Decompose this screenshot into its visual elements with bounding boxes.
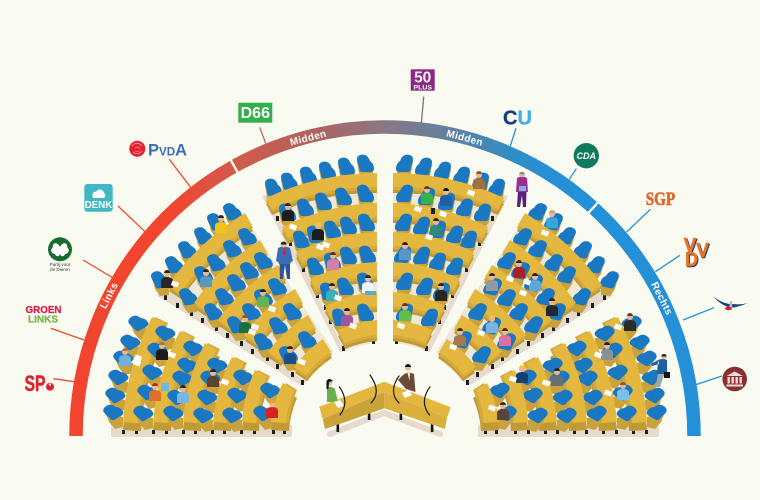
logo: DENK: DENK (85, 200, 113, 211)
logo: SGP: SGP (646, 189, 676, 210)
logo: bird (713, 296, 748, 310)
logo: PvdA (129, 141, 187, 160)
seated members: left middle block (161, 215, 306, 366)
logo: CU: CU (503, 108, 532, 130)
podium papers (334, 390, 412, 408)
seated members: right middle block (449, 210, 558, 351)
logo: Partij voor de Dieren (48, 237, 72, 272)
standing member: blue suit (276, 242, 293, 279)
logo: Partij voor de Dieren: de Dieren (50, 267, 70, 272)
logo: 50PLUS: 50 (414, 70, 431, 86)
speaker podium (319, 364, 451, 434)
panel: right centre bench block (393, 155, 508, 352)
logo: CDA (574, 143, 599, 168)
panel: left centre bench block (262, 155, 377, 352)
standing member: purple suit (516, 172, 528, 207)
logo: CDA: CDA (577, 151, 596, 161)
seated members: right outer block (488, 313, 636, 420)
logo: VVD (684, 235, 710, 271)
logo: VVD: V (684, 235, 697, 257)
political spectrum arc: Links (98, 281, 121, 311)
logo: GroenLinks: GROEN (26, 304, 62, 316)
logo: 50PLUS (411, 69, 435, 91)
panel: left outer bench block (102, 311, 294, 437)
logo: Forum voor Democratie (722, 367, 747, 391)
podium microphones (339, 375, 430, 415)
logo: Partij voor de Dieren: Partij voor (50, 262, 71, 267)
podium speaker: man in brown suit (398, 364, 416, 392)
logo: 50PLUS: PLUS (414, 84, 433, 91)
political spectrum arc: Midden (445, 128, 484, 149)
political spectrum arc (76, 127, 694, 436)
logo: VVD: D (685, 249, 698, 271)
logo: SP: SP (24, 371, 46, 396)
logo: DENK (84, 184, 113, 212)
political spectrum arc: Rechts (648, 280, 674, 317)
panel: right middle bench block (436, 201, 620, 385)
seated members: left centre block (282, 203, 376, 330)
leader lines to party logos (51, 97, 722, 385)
logo: GroenLinks: LINKS (28, 314, 58, 326)
logo: D66: D66 (241, 105, 270, 122)
logo: VVD: V (696, 240, 710, 262)
panel: right outer bench block (476, 311, 668, 437)
podium speaker: woman in green (326, 379, 338, 402)
logo: PvdA: PvdA (148, 141, 187, 160)
standing member: walking man with briefcase (651, 354, 670, 387)
panel: left middle bench block (150, 201, 334, 385)
seated members: right centre block (397, 171, 485, 330)
political spectrum arc: Midden (289, 129, 328, 149)
seated members: left outer block (119, 342, 278, 418)
logo: GroenLinks (26, 304, 62, 326)
